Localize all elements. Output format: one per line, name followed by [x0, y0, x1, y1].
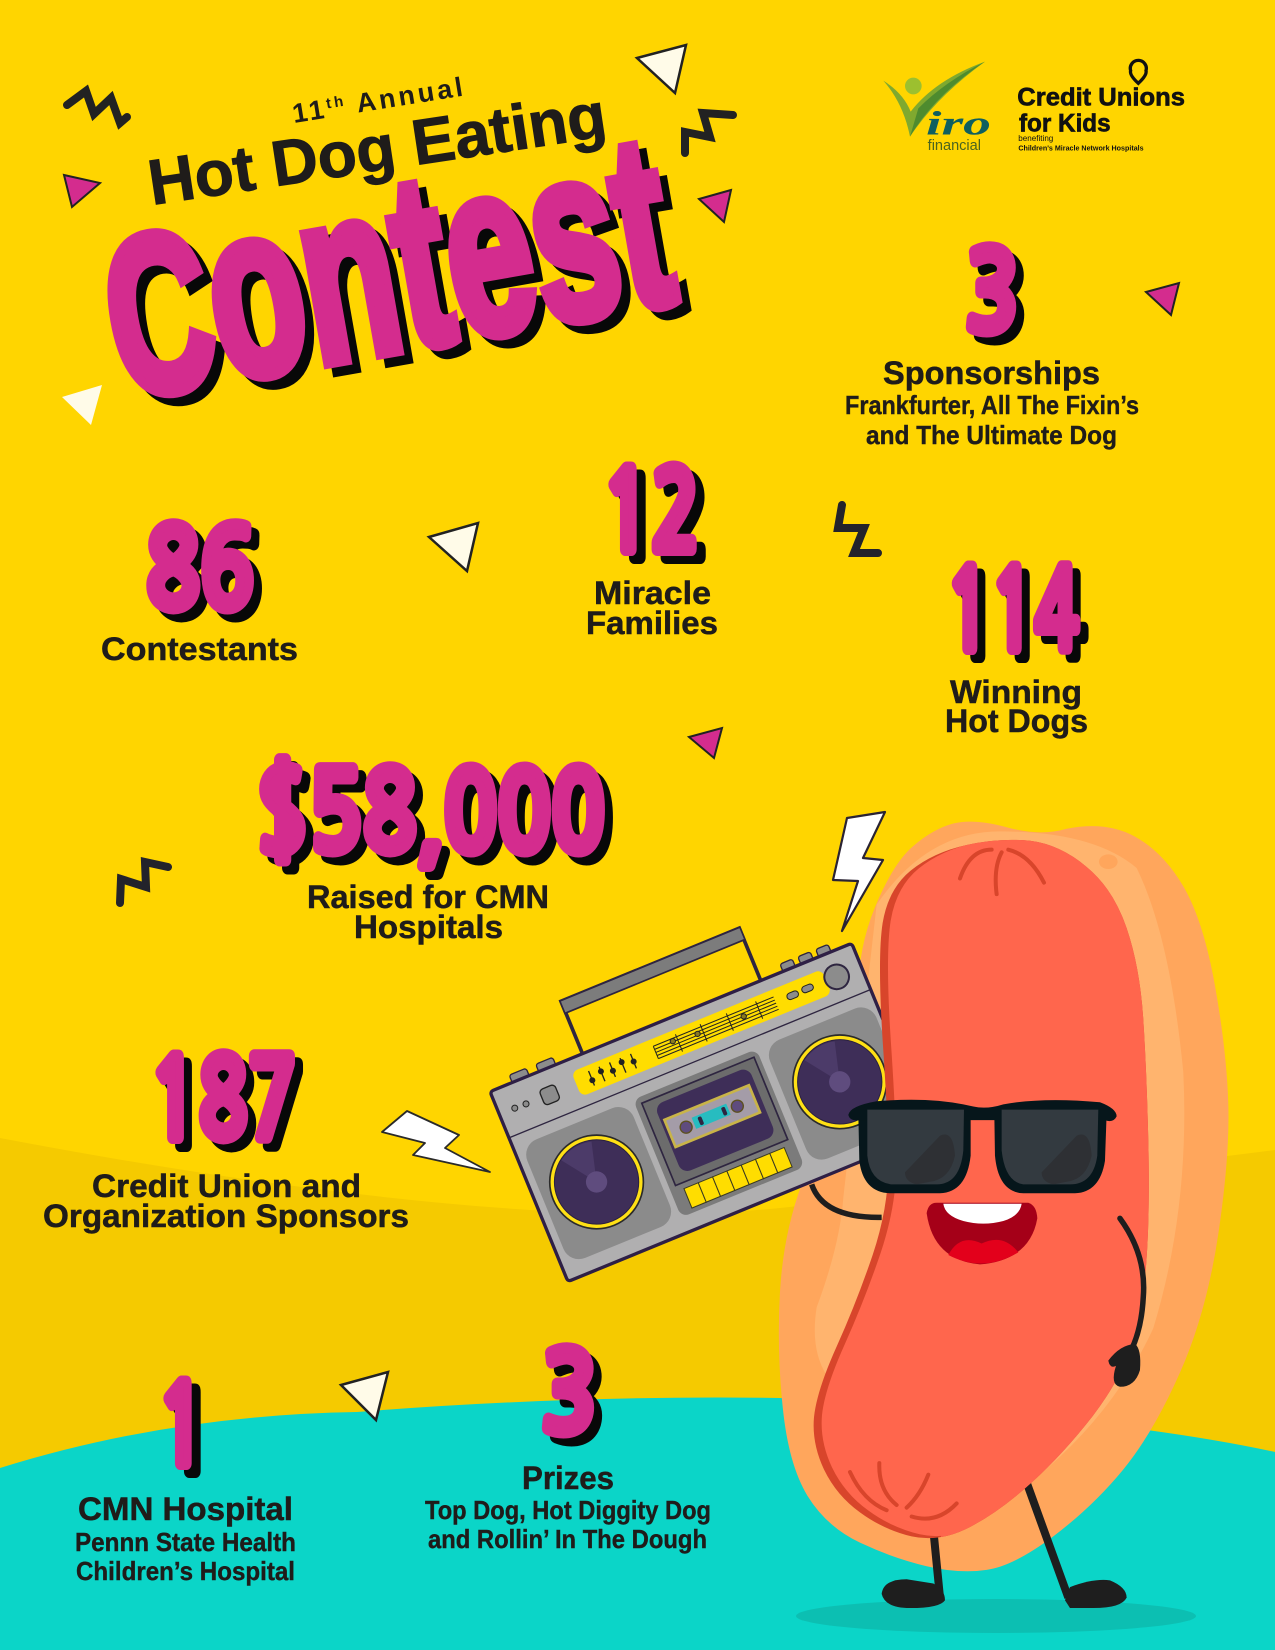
heading: Contest: Contest	[83, 82, 689, 450]
stat: 12 miracle families: Miracle	[594, 575, 711, 611]
pin icon	[1130, 60, 1146, 83]
icon: left lightning bolt	[382, 1111, 490, 1172]
stat: 187 sponsors: Credit Union and	[92, 1168, 361, 1204]
illustration: boombox	[468, 890, 930, 1282]
sausage	[814, 840, 1149, 1538]
logo: Credit Unions for Kids	[1017, 60, 1185, 152]
heading: Hot Dog Eating: Hot Dog Eating	[143, 79, 611, 219]
ground shadow	[796, 1599, 1196, 1633]
display pills	[786, 990, 800, 1001]
music staff	[652, 994, 780, 1061]
stat: 3 sponsorships: and The Ultimate Dog	[866, 420, 1117, 450]
stat: 1 CMN hospital: Pennn State Health	[75, 1527, 296, 1557]
eyebrow: 11th Annual: th	[325, 93, 345, 112]
stat: 86 contestants: Contestants	[101, 631, 298, 667]
stat: 1 CMN hospital	[75, 1372, 296, 1586]
stat: 187 sponsors: Organization Sponsors	[43, 1198, 409, 1234]
background: darker yellow band	[0, 1138, 1275, 1650]
heading: Contest: Contest	[92, 90, 698, 458]
stat: 114 winning hot dogs: 114	[954, 565, 1087, 674]
left controls	[511, 1104, 519, 1112]
stat: 114 winning hot dogs: Hot Dogs	[945, 703, 1088, 739]
illustration: hot dog character	[468, 821, 1228, 1608]
eyebrow: 11th Annual: Annual	[345, 72, 465, 120]
legs and feet	[933, 1483, 1068, 1598]
sausage and face	[814, 840, 1149, 1538]
stat: 3 sponsorships: Frankfurter, All The Fixin’s	[845, 390, 1139, 420]
stat: 3 sponsorships: Sponsorships	[883, 355, 1100, 391]
stat: 3 prizes: and Rollin’ In The Dough	[428, 1524, 707, 1554]
stat: 86 contestants	[101, 516, 298, 667]
heading: Contest	[83, 82, 698, 458]
title	[83, 72, 698, 458]
stat: 3 sponsorships: 3	[973, 247, 1027, 356]
stat: 3 prizes: 3	[541, 1340, 597, 1449]
stat: 114 winning hot dogs: Winning	[950, 674, 1082, 710]
logo: Credit Unions for Kids: Credit Unions	[1017, 84, 1185, 112]
cassette door	[642, 1057, 788, 1186]
stat: 86 contestants: 86	[146, 516, 254, 625]
stat: 187 sponsors: 187	[149, 1046, 297, 1155]
stat: $58,000 raised: $58,000	[263, 765, 613, 876]
stat: 3 prizes: 3	[549, 1348, 605, 1457]
stat: $58,000 raised: Hospitals	[354, 909, 503, 945]
stat: 114 winning hot dogs: 114	[946, 557, 1079, 666]
top buttons	[509, 1068, 530, 1084]
stat: 114 winning hot dogs	[945, 557, 1088, 739]
sunglasses	[848, 1100, 1117, 1193]
mouth	[927, 1203, 1037, 1264]
stat: 187 sponsors: 187	[157, 1054, 305, 1163]
stat: $58,000 raised	[255, 757, 613, 945]
stat: 3 sponsorships	[845, 239, 1139, 450]
center panel	[633, 1049, 805, 1217]
stat: 1 CMN hospital: 1	[157, 1372, 206, 1481]
left speaker	[521, 1102, 676, 1264]
logo: Credit Unions for Kids: for Kids	[1019, 110, 1111, 138]
stat: 12 miracle families: Families	[586, 605, 718, 641]
knob	[821, 961, 853, 993]
stat: 1 CMN hospital: Children’s Hospital	[76, 1556, 295, 1586]
decorative triangles and zigzags	[62, 45, 1179, 1420]
stat: 86 contestants: 86	[154, 524, 262, 633]
logo: Viro Financial	[883, 62, 991, 154]
handle	[561, 928, 763, 1060]
stat: 1 CMN hospital: CMN Hospital	[78, 1491, 293, 1527]
body	[490, 943, 930, 1282]
right speaker	[764, 1002, 919, 1165]
icon: top lightning bolt	[833, 812, 885, 931]
stat: 187 sponsors	[43, 1046, 409, 1234]
stat: $58,000 raised: Raised for CMN	[307, 879, 549, 915]
eyebrow: 11th Annual: 11	[290, 94, 326, 129]
cassette	[664, 1085, 760, 1147]
logo: Credit Unions for Kids: benefiting	[1018, 134, 1053, 143]
sausage creases	[850, 850, 1044, 1519]
stat: 12 miracle families: 12	[611, 466, 709, 575]
stat: $58,000 raised: $58,000	[255, 757, 605, 868]
yellow keys	[684, 1148, 792, 1208]
bun	[779, 822, 1228, 1608]
stat: 12 miracle families	[586, 458, 718, 641]
stat: 3 prizes: Prizes	[522, 1460, 614, 1496]
logo: Credit Unions for Kids: Children's Miracle Network Hospitals	[1018, 143, 1144, 152]
right arm and hand	[1108, 1218, 1144, 1387]
sliders	[586, 1053, 639, 1086]
logo: Viro Financial: financial	[928, 138, 981, 154]
yellow display	[571, 969, 832, 1097]
stat: 3 sponsorships: 3	[965, 239, 1019, 348]
logo: Viro Financial: iro	[926, 105, 991, 142]
stat: 3 prizes	[425, 1340, 711, 1554]
left arm	[812, 1184, 882, 1217]
stat: 12 miracle families: 12	[602, 458, 700, 567]
stat: 3 prizes: Top Dog, Hot Diggity Dog	[425, 1495, 711, 1525]
stat: 1 CMN hospital: 1	[166, 1380, 215, 1489]
background: teal ground	[0, 1398, 1275, 1650]
